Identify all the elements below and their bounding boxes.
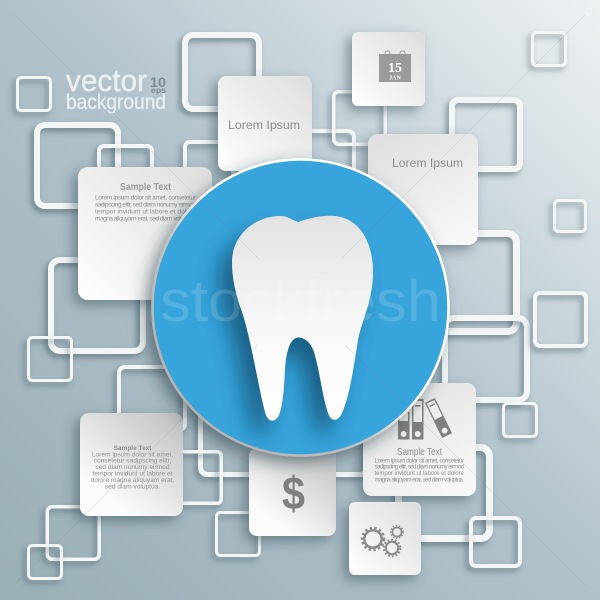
card: binders: sadipscing elitr, sed diam nonumy eirmod: [374, 465, 464, 471]
card: binders: [363, 383, 476, 496]
card: Lorem Ipsum top: [218, 76, 312, 171]
card: Sample Text lower left: sed diam nonumy eirmod: [95, 464, 170, 471]
blue circle with tooth: [152, 160, 448, 456]
title: vector background: eps: [151, 85, 166, 95]
card: Sample Text left: Sample Text: [120, 181, 171, 193]
title: vector background: 10: [150, 74, 166, 90]
card: Sample Text left: magna aliquyam erat, sed diam voluptua.: [95, 216, 196, 222]
card: Sample Text lower left: Lorem ipsum dolor sit amet,: [92, 451, 173, 458]
title: vector background: vector: [66, 63, 147, 98]
card: binders: Sample Text: [397, 446, 442, 458]
card: Sample Text lower left: dolore magna aliquyam erat,: [91, 477, 174, 484]
title: vector background: background: [66, 91, 166, 114]
card: dollar: [249, 448, 336, 536]
icon: binders: [398, 398, 452, 440]
card: gears: [349, 502, 421, 575]
icon: dollar sign: $: [282, 467, 305, 519]
card: Sample Text lower left: sed diam voluptua.: [105, 484, 160, 491]
card: Sample Text left: tempor invidunt ut labore et dolore: [95, 208, 196, 216]
icon: gears: [362, 526, 403, 556]
title: vector background: [66, 63, 166, 114]
card: Sample Text lower left: Sample Text: [114, 445, 152, 452]
card: Sample Text left: sadipscing elitr, sed diam nonumy eirmod: [95, 202, 196, 208]
card: binders: tempor invidunt ut labore et dolore: [374, 471, 465, 477]
card: calendar: [352, 32, 425, 106]
card: Lorem Ipsum right: Lorem Ipsum: [392, 156, 463, 170]
icon: calendar: [379, 51, 411, 82]
icon: tooth: [232, 216, 373, 421]
blue circle: [152, 160, 448, 456]
card: Sample Text lower left: [80, 413, 183, 516]
card: Sample Text lower left: consetetur sadipscing elitr,: [94, 458, 172, 465]
tooth shadow: [219, 232, 360, 437]
card: Sample Text left: [78, 167, 212, 300]
card: Sample Text lower left: tempor invidunt ut labore et: [93, 471, 173, 478]
card: binders: magna aliquyam erat, sed diam voluptua.: [374, 477, 464, 483]
card: Lorem Ipsum right: [368, 134, 478, 245]
icon: calendar: JAN: [389, 76, 401, 82]
icon: calendar: 15: [388, 61, 402, 76]
card: Lorem Ipsum top: Lorem Ipsum: [228, 118, 300, 132]
watermark: stockfresh: [160, 269, 441, 334]
card: binders: Lorem ipsum dolor sit amet, consetetur: [374, 458, 464, 464]
card: Sample Text left: Lorem ipsum dolor sit amet, consetetur: [95, 194, 197, 202]
